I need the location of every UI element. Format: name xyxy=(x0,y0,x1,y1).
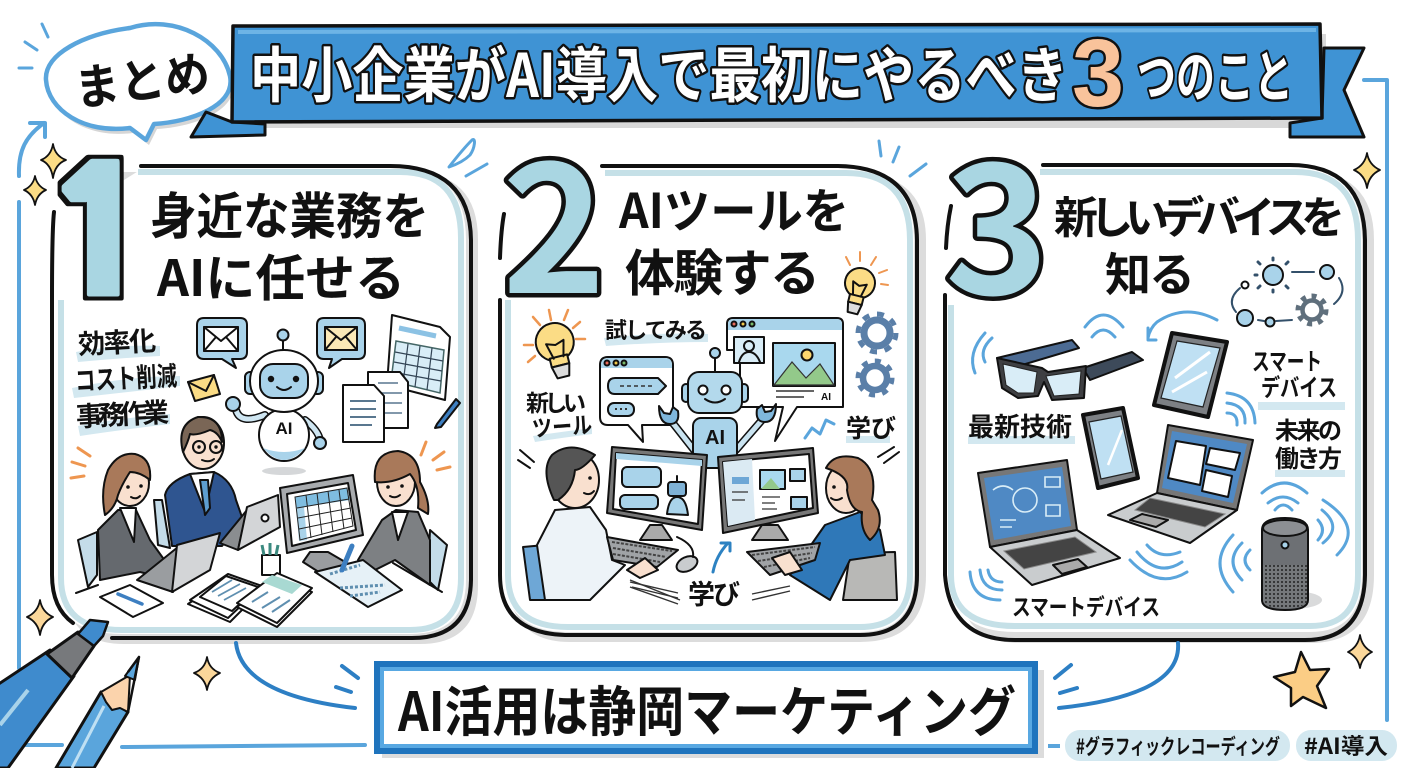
label: 学び bottom with arrow xyxy=(630,543,790,612)
label: 学び right: 学び xyxy=(846,409,896,445)
chat window xyxy=(600,357,673,442)
speech bubble: まとめ: まとめ xyxy=(70,34,213,120)
back laptop xyxy=(220,495,280,550)
icon: marker pen xyxy=(0,620,108,768)
panel 3 frame xyxy=(945,165,1374,643)
icon: smart glasses xyxy=(997,340,1143,400)
connector lines to footer xyxy=(236,643,1178,708)
panel 2 xyxy=(500,89,926,642)
title ribbon: 3 xyxy=(1072,20,1124,127)
left keyboard and mouse xyxy=(607,537,700,604)
label: 未来の働き方: 未来の xyxy=(1275,411,1342,446)
keywords: 効率化 xyxy=(77,319,157,362)
icon: tablet xyxy=(1154,333,1227,417)
icon: light bulb small xyxy=(838,252,888,317)
person: man center xyxy=(154,417,243,548)
label: 未来の働き方: 働き方 xyxy=(1275,439,1342,474)
table items: desk papers xyxy=(76,543,442,627)
panel 2 frame xyxy=(500,166,926,642)
heading 1: 身近な業務を xyxy=(150,177,429,249)
label: 試してみる: 試してみる xyxy=(605,313,707,345)
heading 1: AIに任せる xyxy=(156,239,405,311)
number 1: 1 xyxy=(46,147,153,321)
heading 2: AIツールを xyxy=(618,172,849,242)
keywords xyxy=(72,319,180,436)
title ribbon: つのこと xyxy=(1137,33,1293,114)
icon: laptop left xyxy=(978,460,1120,585)
heading 3: 新しいデバイスを xyxy=(1054,182,1345,246)
icon: mail bubbles xyxy=(188,318,365,401)
label: スマートデバイス right: デバイス xyxy=(1261,368,1337,403)
gears xyxy=(858,314,896,395)
label: 学び right xyxy=(805,409,896,445)
front laptop xyxy=(137,533,220,592)
robot 2 xyxy=(659,348,776,468)
number 3: 3 xyxy=(945,90,1049,345)
star xyxy=(1274,652,1329,708)
speech bubble: まとめ xyxy=(19,24,234,145)
person: woman right xyxy=(358,442,450,590)
person: woman left xyxy=(71,448,168,587)
hashtag pills: #AI導入 xyxy=(1304,729,1388,761)
heading 2 xyxy=(618,172,849,306)
label: 新しいツール xyxy=(526,384,593,444)
label: スマートデバイス right xyxy=(1252,342,1345,410)
wifi waves xyxy=(970,315,1348,600)
panel 1 xyxy=(46,147,478,644)
icon: light bulb large xyxy=(524,310,585,382)
label: 新しいツール: ツール xyxy=(531,406,593,444)
robot 1: AI xyxy=(276,419,292,438)
icon: smartphone xyxy=(1083,408,1138,488)
icon: laptop right xyxy=(1108,425,1253,543)
left monitor xyxy=(607,447,707,540)
hashtag pills: #グラフィックレコーディング xyxy=(1076,731,1280,761)
robot 2: AI xyxy=(705,427,725,449)
title ribbon xyxy=(191,20,1364,137)
keywords: コスト削減 xyxy=(74,354,178,399)
label: 新しいツール: 新しい xyxy=(526,384,586,418)
footer banner: AI活用は静岡マーケティング: AI活用は静岡マーケティング xyxy=(397,668,1016,747)
icon: documents and spreadsheet xyxy=(343,315,460,442)
panel 3 xyxy=(945,90,1374,643)
image window xyxy=(727,318,843,441)
person: man at monitor xyxy=(518,448,625,600)
heading 1 xyxy=(150,177,429,311)
right monitor xyxy=(718,448,818,540)
heading 3: 知る xyxy=(1105,239,1195,305)
sparkles xyxy=(24,144,1380,690)
network diagram xyxy=(1232,258,1343,326)
title ribbon: 中小企業がAI導入で最初にやるべき xyxy=(250,28,1068,115)
robot 1 xyxy=(226,330,326,475)
person: woman at monitor xyxy=(747,447,899,600)
panel 1 frame xyxy=(52,166,478,644)
swoosh arrow xyxy=(1148,312,1217,340)
accent ticks near panels xyxy=(449,139,926,176)
keywords: 事務作業 xyxy=(75,391,170,434)
label: 学び bottom with arrow: 学び xyxy=(688,573,740,612)
monitor with spreadsheet xyxy=(280,475,363,576)
icon: pencil xyxy=(56,657,139,768)
label: 最新技術: 最新技術 xyxy=(968,407,1072,444)
label: 未来の働き方 xyxy=(1275,411,1345,477)
label: スマートデバイス right: スマート xyxy=(1252,342,1322,377)
label: スマートデバイス bottom: スマートデバイス xyxy=(1012,588,1160,622)
image window: AI xyxy=(821,392,831,403)
heading 3 xyxy=(1054,182,1345,305)
heading 2: 体験する xyxy=(625,234,820,306)
icon: smart speaker xyxy=(1262,518,1322,610)
number 2: 2 xyxy=(502,89,606,344)
